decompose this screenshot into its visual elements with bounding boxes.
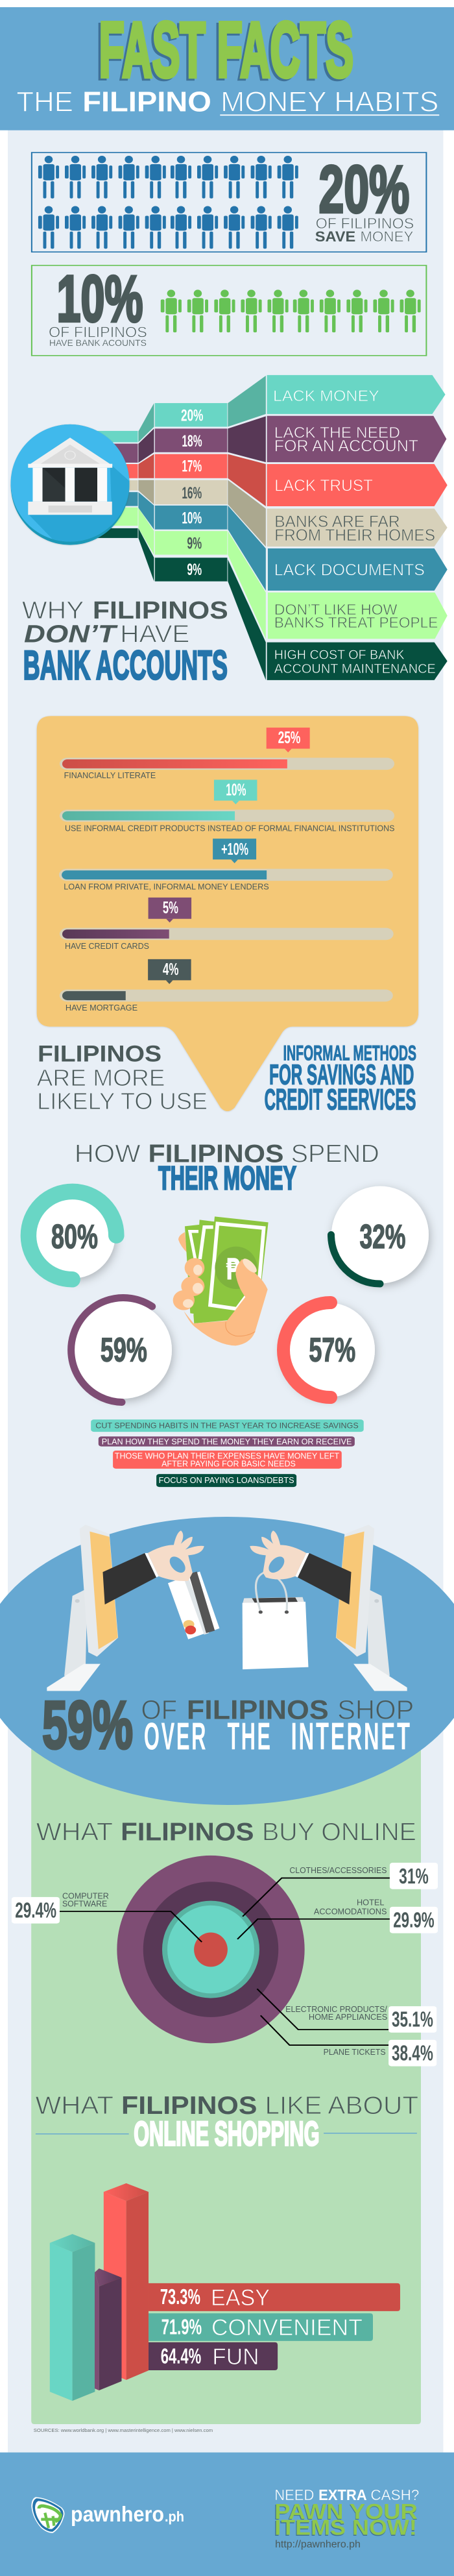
- icon: left arm and hand: [102, 1530, 204, 1604]
- ribbon: high cost of bank account maintenance: [267, 643, 448, 680]
- ribbon: don't like how banks treat people: [268, 593, 448, 639]
- ribbon: don't like how banks treat people: DON’T LIKE HOW: [274, 601, 398, 618]
- call to action: CASH?: [370, 2488, 419, 2504]
- bar: private money lenders +10%: [59, 839, 393, 891]
- bar: easy 73.3%: [149, 2283, 400, 2311]
- leader lines: [60, 1878, 390, 2045]
- donut: 32%: 32%: [359, 1218, 405, 1256]
- call to action: ITEMS NOW!: [274, 2516, 417, 2540]
- call to action: [274, 2488, 419, 2550]
- ribbon: lack the need for an account: [267, 416, 446, 462]
- bar: credit cards 5%: HAVE CREDIT CARDS: [65, 942, 149, 951]
- legend pill: cut spending: [91, 1419, 364, 1432]
- section: how filipinos spend heading: SPEND: [291, 1140, 379, 1168]
- footer band: [0, 2453, 454, 2576]
- call to action: ITEMS NOW!: [274, 2517, 417, 2541]
- chart: concentric circles: [117, 1856, 305, 2043]
- chart: 3d bars: [50, 2183, 149, 2401]
- percent boxes: 17%: [182, 456, 202, 475]
- heading: why filipinos don't have bank accounts: HAVE: [120, 620, 189, 648]
- stat: 10%: 10%: [57, 262, 143, 336]
- icon: credit card: [168, 1571, 219, 1639]
- panel: green background: [31, 1739, 421, 2424]
- callout: plane tickets 38.4%: [324, 2040, 436, 2067]
- callout: clothes 31%: [289, 1863, 438, 1889]
- caption: of filipinos have bank accounts: [49, 323, 147, 349]
- percent boxes: 20%: [181, 406, 203, 424]
- donut: 59%: [71, 1298, 172, 1402]
- heading: what filipinos like about online shopping: LIKE ABOUT: [265, 2092, 418, 2120]
- strips from bank: [87, 431, 138, 538]
- icon: bank: [11, 424, 130, 545]
- heading: why filipinos don't have bank accounts: FILIPINOS: [93, 596, 228, 624]
- callout: electronics 35.1%: HOME APPLIANCES: [309, 2013, 387, 2022]
- callout: hotel 29.9%: HOTEL: [357, 1898, 385, 1907]
- bar: financially literate 25%: 25%: [278, 729, 300, 747]
- sources: SOURCES: www.worldbank.org | www.masterintelligence.com | www.nielsen.com: [34, 2427, 213, 2433]
- donut: 80%: [29, 1192, 116, 1279]
- logo: pawnhero wordmark: pawnhero: [71, 2502, 164, 2526]
- bar: fun 64.4%: FUN: [212, 2344, 259, 2370]
- bar: credit cards 5%: 5%: [163, 899, 178, 917]
- ribbon: banks are far: BANKS ARE FAR: [274, 512, 400, 530]
- caption: of filipinos have bank accounts: OF FILIPINOS: [49, 323, 147, 341]
- heading: filipinos are more likely to use: LIKELY TO USE: [37, 1088, 208, 1114]
- icon: shopping bag: [243, 1571, 308, 1669]
- legend pill: those who plan: THOSE WHO PLAN THEIR EXPENSES HAVE MONEY LEFT: [115, 1451, 340, 1460]
- callout: computer software 29.4%: COMPUTER: [62, 1891, 109, 1900]
- heading: what filipinos like about online shopping: FILIPINOS: [121, 2092, 257, 2120]
- ribbon: lack money: LACK MONEY: [273, 387, 379, 405]
- section: why filipinos don't have bank accounts: [11, 375, 448, 689]
- icon: hand holding money: [173, 1216, 269, 1345]
- heading: filipinos are more likely to use: ARE MORE: [37, 1064, 165, 1091]
- legend pill: those who plan: AFTER PAYING FOR BASIC NEEDS: [161, 1459, 296, 1468]
- bar: mortgage 4%: 4%: [163, 961, 179, 979]
- caption: of filipinos save money: MONEY: [360, 230, 414, 245]
- callout: electronics 35.1%: ELECTRONIC PRODUCTS/: [285, 2005, 387, 2014]
- bar: private money lenders +10%: LOAN FROM PRIVATE, INFORMAL MONEY LENDERS: [64, 882, 269, 891]
- percent boxes: 10%: [182, 508, 202, 527]
- panel: 20% save money: [32, 151, 426, 252]
- legend pill: focus on paying loans: [156, 1474, 296, 1487]
- section: how filipinos spend heading: [75, 1140, 379, 1197]
- icon: right arm and hand: [250, 1530, 352, 1604]
- heading: of filipinos shop over the internet: OVER: [144, 1716, 208, 1758]
- heading: what filipinos like about online shopping: [35, 2092, 418, 2153]
- donut: 59%: 59%: [101, 1331, 147, 1369]
- donut: 32%: [331, 1186, 429, 1284]
- bar: convenient 71.9%: [149, 2313, 373, 2341]
- illustration: online shopping: [42, 1525, 414, 1763]
- heading: filipinos are more likely to use: FILIPINOS: [38, 1041, 161, 1066]
- bar: credit cards 5%: [60, 898, 394, 951]
- heading: of filipinos shop over the internet: [141, 1695, 414, 1758]
- heading: why filipinos don't have bank accounts: WHY: [22, 596, 84, 624]
- legend pill: focus on paying loans: FOCUS ON PAYING LOANS/DEBTS: [159, 1476, 294, 1485]
- ribbon: high cost of bank account maintenance: HIGH COST OF BANK: [274, 647, 405, 662]
- heading: filipinos are more likely to use: [37, 1041, 208, 1114]
- call to action: http://pawnhero.ph: [275, 2539, 361, 2550]
- ribbon: lack documents: [268, 548, 448, 591]
- callout: hotel 29.9%: [314, 1898, 438, 1933]
- bar: mortgage 4%: HAVE MORTGAGE: [66, 1003, 137, 1012]
- heading: what filipinos buy online: [36, 1818, 416, 1846]
- donut: 80%: 80%: [51, 1218, 98, 1256]
- bar: convenient 71.9%: 71.9%: [161, 2316, 202, 2339]
- logo: pawnhero wordmark: .ph: [165, 2509, 184, 2525]
- percent boxes: 9%: [187, 534, 202, 552]
- percent boxes: 9%: [187, 560, 202, 578]
- section: how filipinos spend heading: THEIR MONEY: [158, 1160, 296, 1197]
- subtitle: [16, 86, 439, 117]
- bar: fun 64.4%: 64.4%: [161, 2345, 201, 2368]
- heading: what filipinos like about online shopping: WHAT: [35, 2092, 114, 2120]
- logo: pawnhero shield: [31, 2497, 64, 2533]
- ribbon: lack the need for an account: LACK THE NEED: [274, 423, 400, 441]
- donut: 57%: [280, 1303, 375, 1397]
- percent boxes: [155, 403, 227, 582]
- section: pills and online shopping: [99, 1436, 355, 1487]
- heading: of filipinos shop over the internet: SHOP: [337, 1695, 414, 1724]
- callout: hotel 29.9%: ACCOMODATIONS: [314, 1907, 387, 1916]
- heading: informal methods for savings and credit services: [265, 1041, 416, 1116]
- heading: why filipinos don't have bank accounts: [22, 596, 228, 689]
- ribbon: lack trust: [267, 464, 448, 506]
- callout: computer software 29.4%: [12, 1891, 109, 1924]
- call to action: PAWN YOUR: [274, 2501, 418, 2525]
- donut: 57%: 57%: [309, 1331, 355, 1369]
- icons: ten people: [161, 289, 421, 332]
- percent boxes: 18%: [182, 432, 202, 450]
- callout panel: [37, 716, 418, 1111]
- bar: fun 64.4%: [149, 2342, 278, 2370]
- heading: what filipinos buy online: FILIPINOS: [121, 1818, 254, 1846]
- section: informal methods: [37, 716, 418, 1116]
- bar: easy 73.3%: EASY: [211, 2285, 270, 2310]
- ribbon: lack money: [267, 375, 446, 414]
- bar: private money lenders +10%: +10%: [221, 840, 248, 859]
- ribbon: banks are far: [267, 509, 448, 546]
- stat: 59%: 59%: [42, 1687, 133, 1763]
- ribbon: lack trust: LACK TRUST: [274, 476, 373, 495]
- bar: easy 73.3%: 73.3%: [160, 2285, 200, 2309]
- heading: of filipinos shop over the internet: OF: [141, 1695, 177, 1724]
- panel: 10% have bank accounts: [32, 262, 426, 356]
- section: what filipinos buy online: [12, 1818, 438, 2153]
- callout: clothes 31%: 31%: [399, 1865, 429, 1889]
- heading: why filipinos don't have bank accounts: DON’T: [24, 620, 118, 648]
- section: how filipinos spend heading: HOW: [75, 1140, 141, 1168]
- callout: electronics 35.1%: [285, 2005, 436, 2033]
- bar: informal credit products 10%: 10%: [226, 781, 246, 800]
- callout: computer software 29.4%: 29.4%: [15, 1898, 56, 1923]
- callout: clothes 31%: CLOTHES/ACCESSORIES: [289, 1866, 387, 1875]
- caption: of filipinos have bank accounts: HAVE BANK ACOUNTS: [49, 339, 147, 349]
- heading: of filipinos shop over the internet: THE: [227, 1716, 272, 1758]
- bar: informal credit products 10%: [60, 779, 394, 833]
- caption: of filipinos save money: OF FILIPINOS: [316, 215, 414, 232]
- caption: of filipinos save money: SAVE: [315, 230, 355, 245]
- bar: financially literate 25%: [60, 728, 394, 780]
- heading: of filipinos shop over the internet: FILIPINOS: [187, 1695, 329, 1724]
- bar: financially literate 25%: FINANCIALLY LITERATE: [64, 770, 156, 780]
- subtitle: THE: [16, 86, 73, 117]
- icon: hand holding money: ₱: [226, 1253, 241, 1287]
- legend pill: plan how they spend: PLAN HOW THEY SPEND THE MONEY THEY EARN OR RECEIVE: [102, 1437, 352, 1446]
- right connectors: [228, 376, 266, 680]
- heading: what filipinos buy online: BUY ONLINE: [262, 1818, 416, 1846]
- blue ellipse: [0, 1517, 454, 1805]
- section: bars and footer: [0, 2183, 454, 2576]
- bar: mortgage 4%: [60, 959, 393, 1012]
- heading: what filipinos buy online: WHAT: [36, 1818, 113, 1846]
- icon: right monitor: [336, 1525, 407, 1691]
- subtitle: FILIPINO: [82, 86, 211, 117]
- callout: computer software 29.4%: SOFTWARE: [62, 1899, 107, 1908]
- bar: convenient 71.9%: CONVENIENT: [211, 2314, 363, 2340]
- legend pill: cut spending: CUT SPENDING HABITS IN THE PAST YEAR TO INCREASE SAVINGS: [95, 1421, 359, 1430]
- call to action: NEED: [274, 2488, 314, 2504]
- icon: left monitor: [47, 1525, 118, 1691]
- ribbon: lack the need for an account: FOR AN ACCOUNT: [274, 437, 418, 455]
- percent boxes: 16%: [182, 484, 202, 502]
- left connectors: [138, 403, 154, 582]
- header band: [0, 6, 454, 356]
- caption: of filipinos save money: [315, 215, 414, 245]
- icons: twenty people: [38, 156, 298, 249]
- callout: plane tickets 38.4%: PLANE TICKETS: [324, 2048, 386, 2057]
- call to action: PAWN YOUR: [274, 2500, 418, 2524]
- call to action: EXTRA: [318, 2488, 367, 2504]
- legend pill: those who plan: [113, 1451, 342, 1469]
- section: how filipinos spend heading: FILIPINOS: [149, 1140, 284, 1168]
